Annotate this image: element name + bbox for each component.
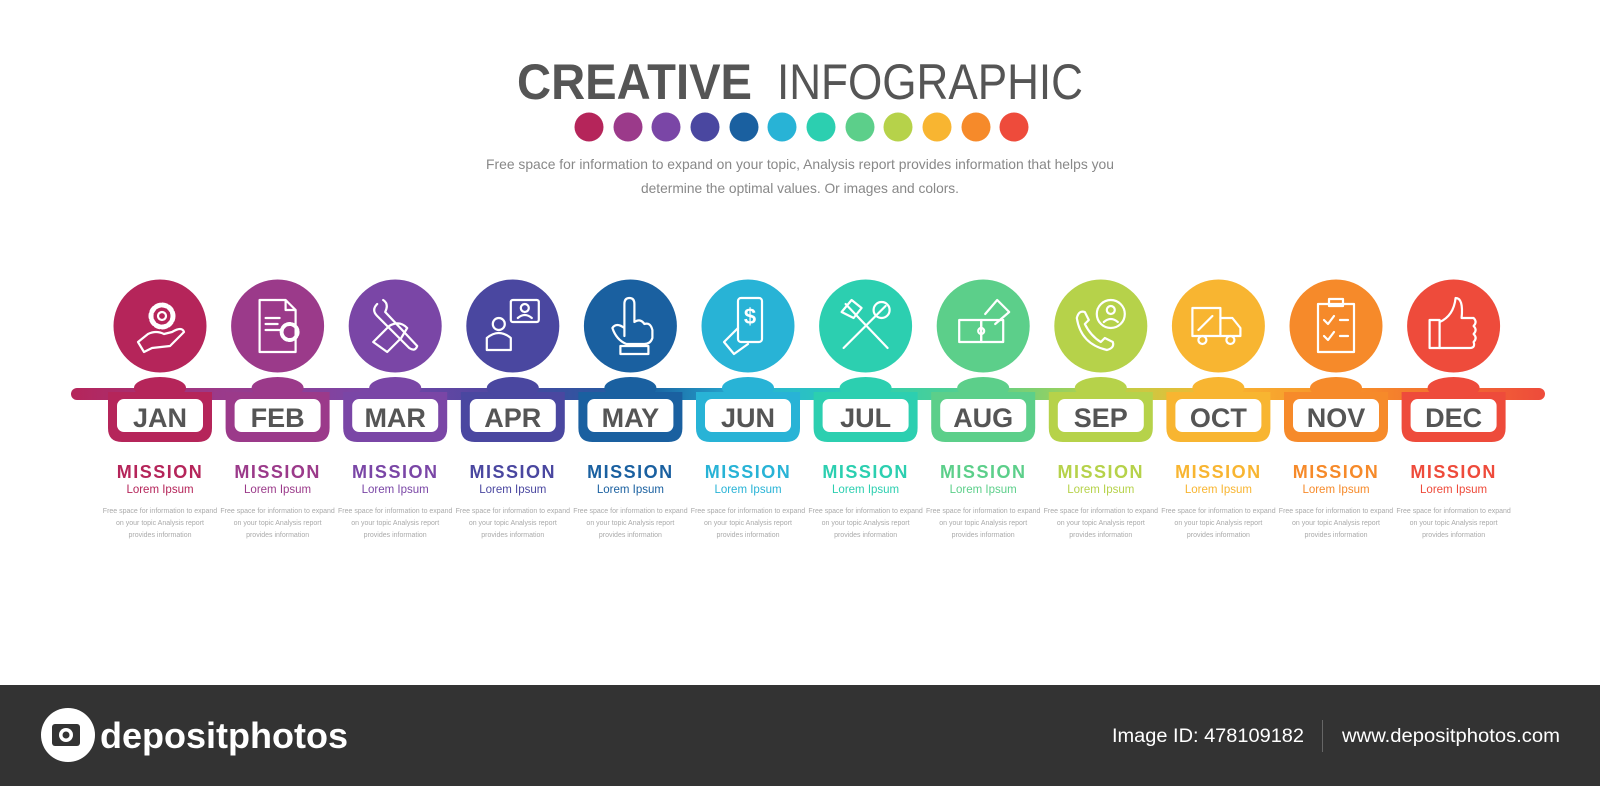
icon: phone with dollar bbox=[724, 298, 762, 354]
lorem ipsum subheadings: Lorem Ipsum bbox=[1302, 484, 1370, 496]
description texts: Free space for information to expand bbox=[1044, 508, 1158, 515]
description texts: Free space for information to expand bbox=[1396, 508, 1511, 515]
description texts: Free space for information to expand bbox=[103, 508, 217, 515]
icon: clipboard bbox=[1318, 299, 1354, 352]
description texts: Free space for information to expand bbox=[691, 508, 805, 515]
month labels: MAR bbox=[364, 403, 426, 433]
timeline bar with month tabs bbox=[71, 377, 1545, 442]
mission headings: MISSION bbox=[117, 462, 203, 482]
icon: truck bbox=[1192, 308, 1240, 344]
description texts: on your topic Analysis report bbox=[1292, 520, 1380, 527]
description texts: Free space for information to expand bbox=[1161, 508, 1276, 515]
footer bar: depositphotos bbox=[100, 715, 348, 756]
description texts: provides information bbox=[599, 532, 662, 539]
subtitle: Free space for information to expand on your topic, Analysis report provides information that helps you bbox=[486, 156, 1114, 172]
title bbox=[517, 54, 1083, 110]
mission headings: MISSION bbox=[705, 462, 791, 482]
lorem ipsum subheadings: Lorem Ipsum bbox=[1420, 484, 1487, 496]
icon: puzzle bbox=[959, 300, 1009, 342]
lorem ipsum subheadings: Lorem Ipsum bbox=[714, 484, 782, 496]
description texts: on your topic Analysis report bbox=[704, 520, 792, 527]
description texts: on your topic Analysis report bbox=[939, 520, 1027, 527]
description texts: on your topic Analysis report bbox=[1410, 520, 1498, 527]
description texts: provides information bbox=[1304, 532, 1368, 539]
mission headings: MISSION bbox=[940, 462, 1026, 482]
icons bbox=[138, 298, 1476, 354]
month labels: FEB bbox=[251, 403, 305, 433]
icon: camera logo bbox=[41, 708, 95, 762]
mission headings: MISSION bbox=[1410, 462, 1497, 482]
footer bar: Image ID: 478109182 bbox=[1112, 726, 1304, 747]
icon: pointing finger bbox=[612, 298, 652, 354]
description texts: provides information bbox=[716, 532, 780, 539]
description texts: on your topic Analysis report bbox=[469, 520, 557, 527]
icon: document gear bbox=[260, 300, 298, 352]
month labels: JUL bbox=[840, 403, 891, 433]
lorem ipsum subheadings: Lorem Ipsum bbox=[362, 484, 429, 496]
description texts: provides information bbox=[128, 532, 192, 539]
description texts: provides information bbox=[952, 532, 1015, 539]
description texts: provides information bbox=[1422, 532, 1485, 539]
description texts: provides information bbox=[481, 532, 544, 539]
title: CREATIVE bbox=[517, 54, 752, 110]
color dots bbox=[574, 112, 1028, 142]
month labels: SEP bbox=[1074, 403, 1128, 433]
description texts: on your topic Analysis report bbox=[234, 520, 322, 527]
icon: hand with wrench bbox=[373, 300, 417, 352]
lorem ipsum subheadings bbox=[126, 484, 1487, 496]
description texts: provides information bbox=[246, 532, 309, 539]
icon: thumbs up bbox=[1430, 298, 1476, 348]
description texts: on your topic Analysis report bbox=[116, 520, 204, 527]
icon: person with chat bbox=[487, 300, 539, 350]
month labels: JUN bbox=[721, 403, 775, 433]
lorem ipsum subheadings: Lorem Ipsum bbox=[244, 484, 311, 496]
lorem ipsum subheadings: Lorem Ipsum bbox=[479, 484, 546, 496]
icon: hand with gear bbox=[138, 305, 184, 352]
description texts: on your topic Analysis report bbox=[351, 520, 439, 527]
lorem ipsum subheadings: Lorem Ipsum bbox=[832, 484, 899, 496]
circles bbox=[114, 280, 1500, 372]
description texts: provides information bbox=[834, 532, 897, 539]
description texts: provides information bbox=[364, 532, 427, 539]
subtitle bbox=[486, 156, 1114, 196]
month labels: NOV bbox=[1307, 403, 1365, 433]
mission headings: MISSION bbox=[234, 462, 321, 482]
mission headings bbox=[117, 462, 1497, 482]
lorem ipsum subheadings: Lorem Ipsum bbox=[950, 484, 1017, 496]
description texts: Free space for information to expand bbox=[573, 508, 688, 515]
month label boxes bbox=[117, 399, 1497, 432]
description texts: on your topic Analysis report bbox=[1057, 520, 1145, 527]
mission headings: MISSION bbox=[822, 462, 909, 482]
lorem ipsum subheadings: Lorem Ipsum bbox=[1067, 484, 1134, 496]
month labels: OCT bbox=[1190, 403, 1247, 433]
description texts: provides information bbox=[1187, 532, 1250, 539]
lorem ipsum subheadings: Lorem Ipsum bbox=[126, 484, 194, 496]
mission headings: MISSION bbox=[1175, 462, 1262, 482]
description texts: Free space for information to expand bbox=[338, 508, 452, 515]
lorem ipsum subheadings: Lorem Ipsum bbox=[1185, 484, 1252, 496]
description texts: on your topic Analysis report bbox=[822, 520, 910, 527]
icon: phone call bbox=[1077, 300, 1125, 350]
title: INFOGRAPHIC bbox=[777, 54, 1083, 110]
footer bar: www.depositphotos.com bbox=[1341, 726, 1560, 747]
mission headings: MISSION bbox=[1293, 462, 1379, 482]
description texts: Free space for information to expand bbox=[926, 508, 1040, 515]
description texts bbox=[103, 508, 1511, 539]
month labels: APR bbox=[484, 403, 541, 433]
month labels: DEC bbox=[1425, 403, 1482, 433]
month labels: JAN bbox=[133, 403, 187, 433]
lorem ipsum subheadings: Lorem Ipsum bbox=[597, 484, 664, 496]
mission headings: MISSION bbox=[352, 462, 438, 482]
mission headings: MISSION bbox=[587, 462, 674, 482]
description texts: Free space for information to expand bbox=[220, 508, 335, 515]
description texts: Free space for information to expand bbox=[808, 508, 923, 515]
month labels: MAY bbox=[602, 403, 659, 433]
mission headings: MISSION bbox=[470, 462, 556, 482]
mission headings: MISSION bbox=[1058, 462, 1144, 482]
description texts: Free space for information to expand bbox=[1279, 508, 1393, 515]
description texts: provides information bbox=[1069, 532, 1132, 539]
icon: hammer and wrench bbox=[842, 300, 890, 348]
description texts: on your topic Analysis report bbox=[586, 520, 674, 527]
description texts: on your topic Analysis report bbox=[1174, 520, 1262, 527]
footer bar bbox=[0, 685, 1600, 786]
month labels bbox=[133, 403, 1482, 433]
month labels: AUG bbox=[953, 403, 1013, 433]
icon: phone with dollar: $ bbox=[744, 304, 756, 329]
subtitle: determine the optimal values. Or images and colors. bbox=[641, 180, 959, 196]
description texts: Free space for information to expand bbox=[456, 508, 570, 515]
